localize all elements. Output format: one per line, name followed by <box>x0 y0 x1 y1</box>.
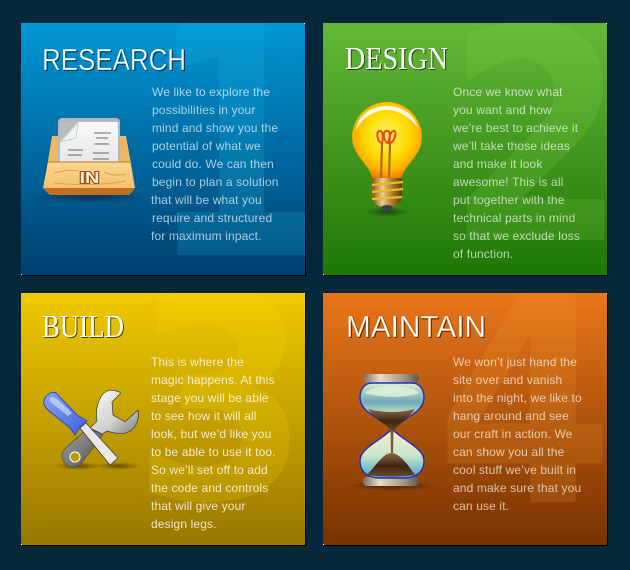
panel: research <box>21 23 306 276</box>
text: maintain body: and make sure that you <box>453 481 581 495</box>
text: research body: could do. We can then <box>152 157 274 171</box>
heading: build: BUILD <box>43 309 125 345</box>
text: design body: you want and how <box>453 103 552 117</box>
text: build body: to be able to use it too. <box>151 445 276 459</box>
text: design body: technical parts in mind <box>453 211 575 225</box>
text: research body: begin to plan a solution <box>152 175 279 189</box>
text: maintain body: We won’t just hand the <box>453 355 577 369</box>
heading: build: BUILD <box>42 308 124 344</box>
text: design body: we’re best to achieve it <box>452 121 579 135</box>
panel: maintain <box>323 293 608 546</box>
text: design body: so that we exclude loss <box>453 229 580 243</box>
heading: maintain: MAINTAIN <box>346 309 486 344</box>
text: design body: and make it look <box>453 157 543 171</box>
text: maintain body <box>453 355 582 513</box>
text: build body: to see how it will all <box>151 409 257 423</box>
text: maintain body: can show you all the <box>453 445 565 459</box>
heading: design: DESIGN <box>345 40 448 76</box>
text: build body <box>151 355 276 531</box>
text: build body: look, but we’d like you <box>151 427 271 441</box>
text: build body: design legs. <box>151 517 217 531</box>
icon label: IN <box>80 170 100 187</box>
icon: inbox crate <box>31 118 147 203</box>
text: maintain body: site over and vanish <box>453 373 562 387</box>
text: maintain body: our craft in action. We <box>453 427 573 441</box>
text: build body: This is where the <box>151 355 244 369</box>
panel: design <box>323 23 608 276</box>
text: research body: We like to explore the <box>152 85 270 99</box>
text: design body: put together with the <box>453 193 565 207</box>
text: design body: of function. <box>453 247 513 261</box>
icon: hourglass <box>346 374 438 491</box>
text: research body: mind and show you the <box>152 121 278 135</box>
heading: research: RESEARCH <box>43 43 187 78</box>
panel: build <box>21 293 306 546</box>
heading: maintain: MAINTAIN <box>347 310 487 345</box>
text: build body: the code and controls <box>151 481 268 495</box>
text: research body: require and structured <box>152 211 272 225</box>
icon: light bulb <box>352 102 422 217</box>
text: maintain body: can use it. <box>453 499 509 513</box>
text: build body: that will give your <box>151 499 246 513</box>
text: maintain body: cool stuff we’ve built in <box>453 463 576 477</box>
heading: research: RESEARCH <box>42 42 186 77</box>
text: maintain body: hang around and see <box>453 409 569 423</box>
text: maintain body: into the night, we like to <box>453 391 582 405</box>
text: build body: stage you will be able <box>151 391 269 405</box>
background numeral 3: 3 <box>132 234 310 566</box>
text: design body <box>452 85 580 261</box>
text: design body: awesome! This is all <box>453 175 563 189</box>
heading: design: DESIGN <box>346 41 449 77</box>
text: research body: possibilities in your <box>152 103 255 117</box>
text: build body: magic happens. At this <box>151 373 275 387</box>
text: build body: So we’ll set off to add <box>151 463 268 477</box>
text: design body: we’ll take those ideas <box>452 139 570 153</box>
text: design body: Once we know what <box>453 85 563 99</box>
text: research body: that will be what you <box>151 193 262 207</box>
text: research body <box>151 85 279 243</box>
text: research body: for maximum inpact. <box>151 229 262 243</box>
text: research body: potential of what we <box>152 139 261 153</box>
icon: screwdriver and wrench <box>44 390 140 470</box>
